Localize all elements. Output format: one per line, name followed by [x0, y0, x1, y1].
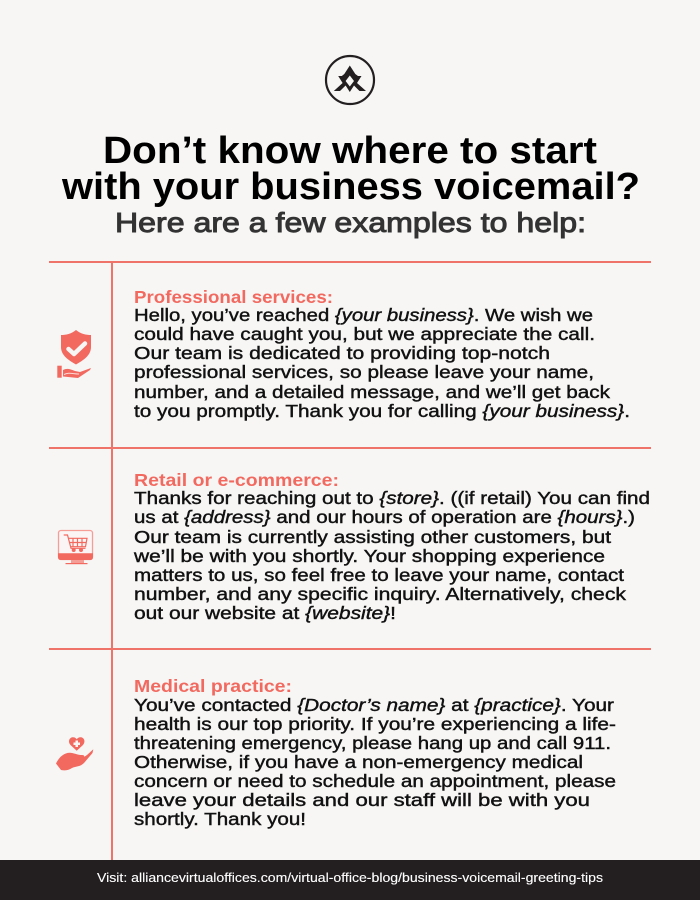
panel: professional services [57, 287, 630, 421]
text block: Hello, you’ve reached {your business} . We wish we [134, 305, 593, 325]
text block: professional services, so please leave your name, [134, 362, 594, 382]
text block: we’ll be with you shortly. Your shopping experience [133, 546, 605, 566]
text block: out our website at {website} ! [134, 603, 396, 623]
heading: Medical practice: [134, 676, 292, 696]
footer: Visit: alliancevirtualoffices.com/virtual-office-blog/business-voicemail-greeting-tips [97, 871, 603, 885]
title [61, 130, 640, 208]
panel: medical practice [56, 676, 616, 829]
text block: leave your details and our staff will be with you [134, 790, 590, 810]
text block [133, 488, 650, 623]
panel: retail or e-commerce [58, 470, 650, 623]
text block: Our team is dedicated to providing top-notch [134, 343, 550, 363]
text block: You’ve contacted {Doctor’s name} at {practice} . Your [134, 695, 614, 715]
text block: number, and a detailed message, and we’ll get back [134, 382, 610, 402]
icon: monitor with shopping cart [58, 530, 93, 564]
text block: Otherwise, if you have a non-emergency medical [134, 752, 583, 772]
heading: Professional services: [134, 287, 333, 307]
logo [326, 56, 374, 104]
text block: us at {address} and our hours of operation are {hours} .) [134, 507, 635, 527]
text block: could have caught you, but we appreciate the call. [134, 324, 595, 344]
text block: to you promptly. Thank you for calling {your business} . [134, 401, 630, 421]
footer [0, 860, 700, 900]
text block [134, 305, 630, 421]
text block: Our team is currently assisting other customers, but [134, 527, 611, 547]
subtitle: Here are a few examples to help: [115, 207, 586, 238]
title: Don’t know where to start [103, 130, 597, 172]
icon: shield in hand [57, 330, 91, 378]
icon: heart in hand [56, 737, 93, 770]
text block: threatening emergency, please hang up and call 911. [134, 733, 611, 753]
heading: Retail or e-commerce: [134, 470, 339, 490]
text block: concern or need to schedule an appointment, please [134, 771, 616, 791]
text block: Thanks for reaching out to {store} . ((if retail) You can find [134, 488, 650, 508]
text block: shortly. Thank you! [134, 809, 306, 829]
title: with your business voicemail? [61, 166, 640, 208]
text block: health is our top priority. If you’re experiencing a life- [134, 714, 616, 734]
text block [134, 695, 616, 829]
text block: matters to us, so feel free to leave your name, contact [134, 565, 624, 585]
text block: number, and any specific inquiry. Alternatively, check [134, 584, 626, 604]
